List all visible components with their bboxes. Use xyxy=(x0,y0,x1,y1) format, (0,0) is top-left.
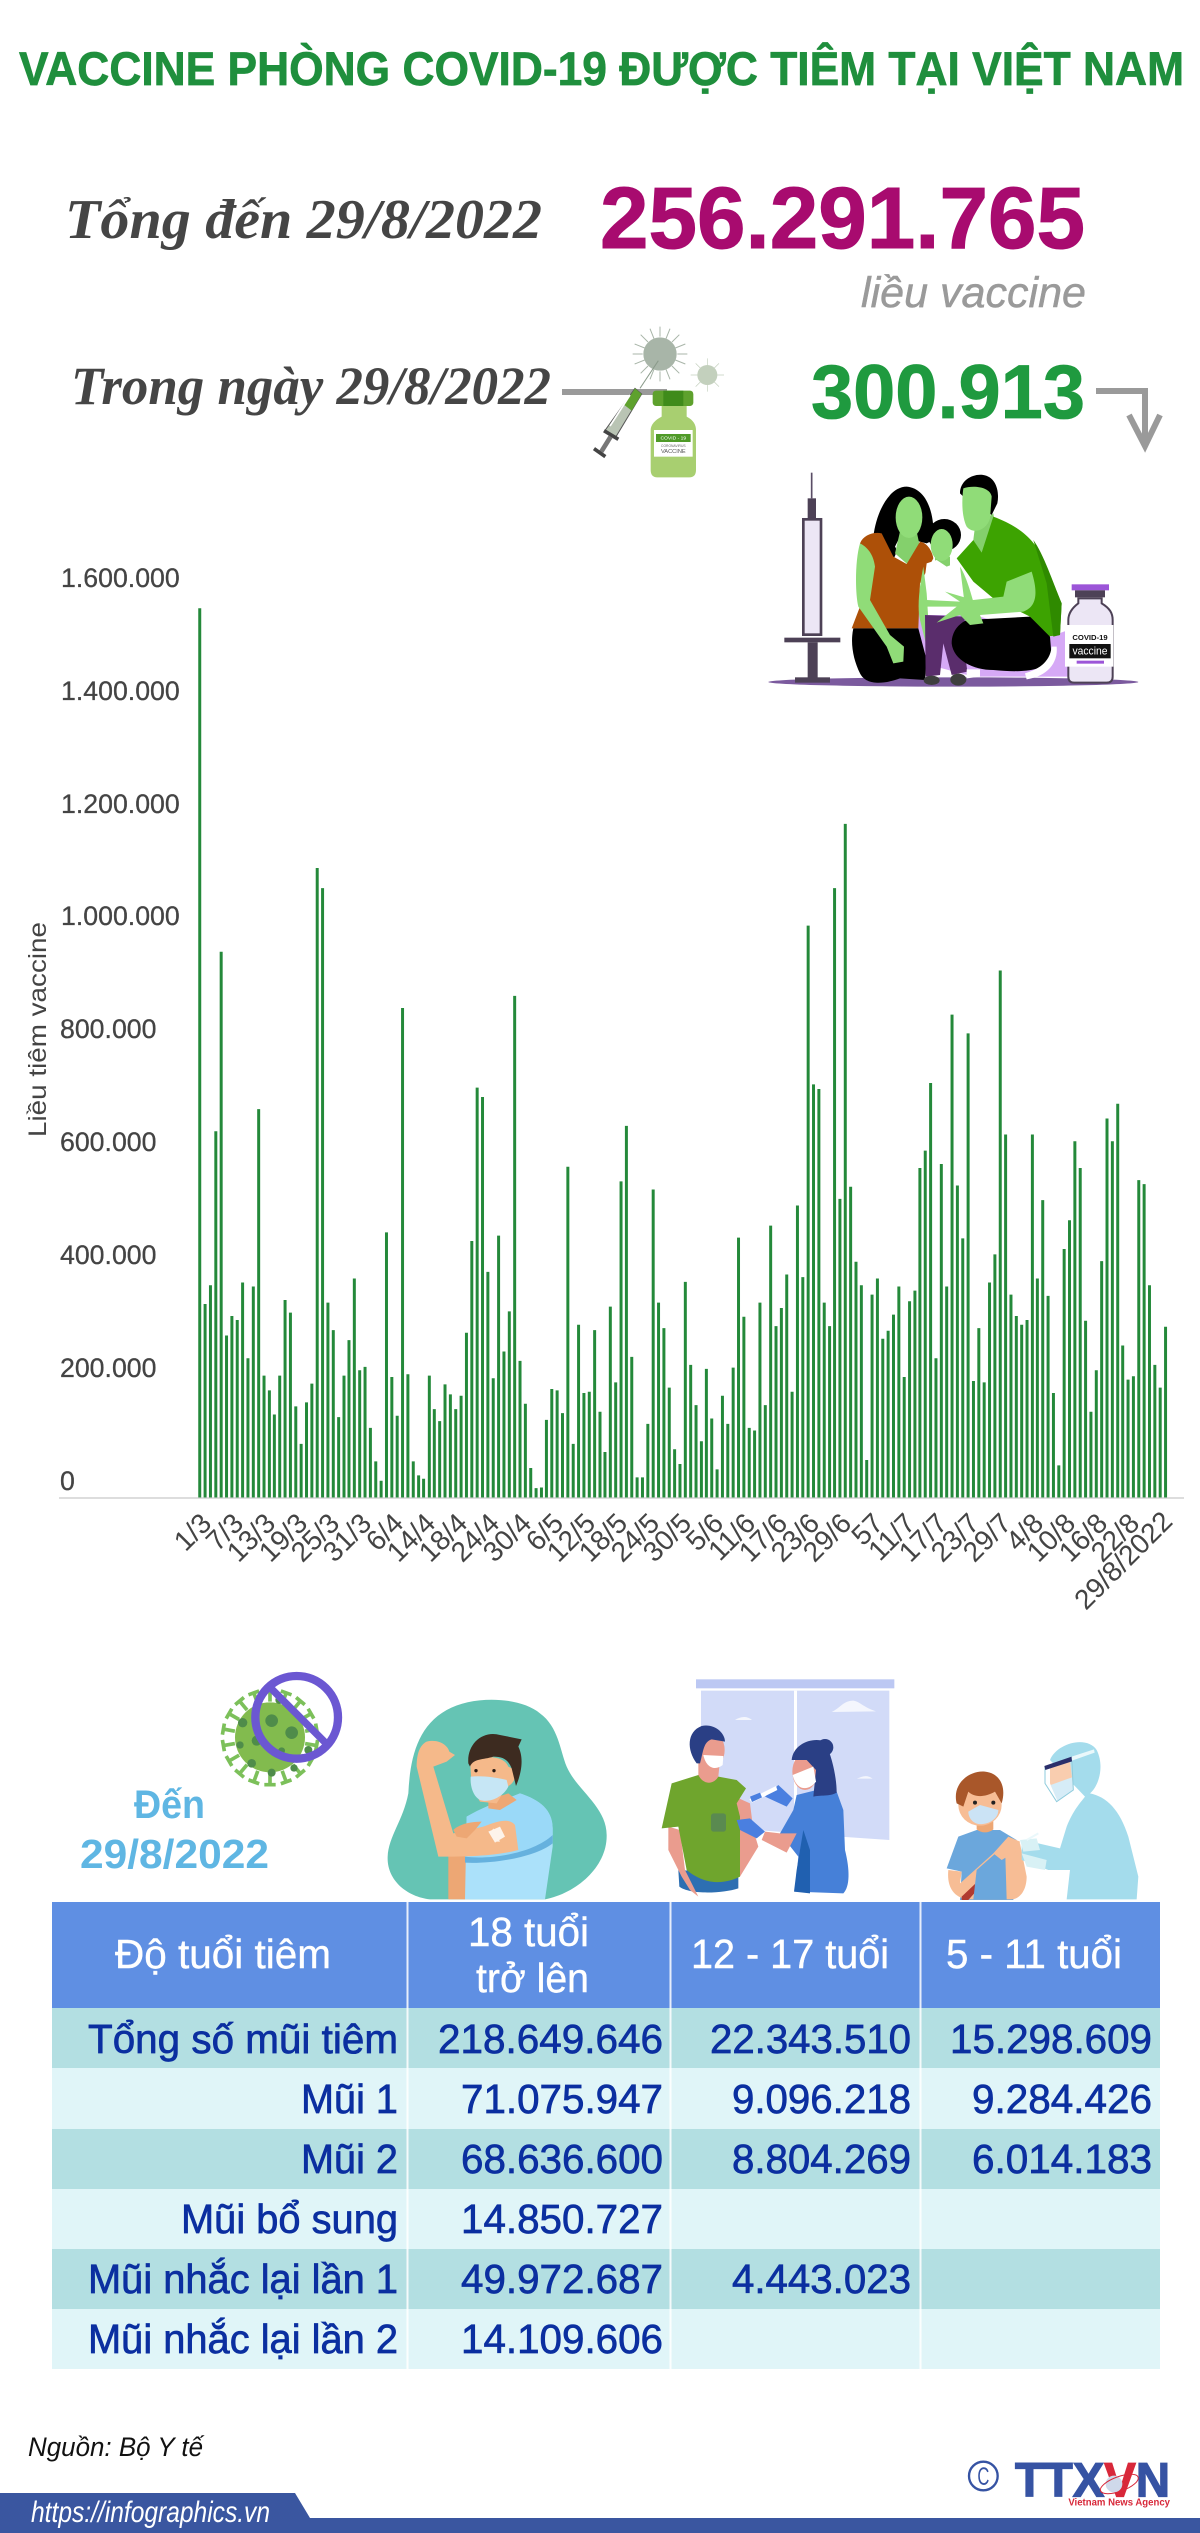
row: second dose xyxy=(52,2129,1160,2189)
x axis date labels: 29/6 xyxy=(797,1507,857,1568)
prohibition sign xyxy=(255,1676,338,1759)
x axis date labels: 17/6 xyxy=(733,1507,793,1568)
bars May to August xyxy=(600,824,1166,1497)
row: second dose: 6.014.183 xyxy=(972,2136,1152,2182)
y axis title: Liều tiêm vaccine xyxy=(24,922,52,1137)
illustration: child receiving injection xyxy=(947,1742,1138,1900)
illustration: family with vaccine xyxy=(768,473,1138,687)
y axis labels: 1.000.000 xyxy=(61,901,180,931)
row: first booster: 4.443.023 xyxy=(732,2256,911,2302)
row: first dose: 9.096.218 xyxy=(732,2076,911,2122)
table header xyxy=(52,1902,1160,2008)
icon: vaccine vial: COVID - 19 xyxy=(660,436,686,442)
x axis date labels: 30/5 xyxy=(637,1507,697,1568)
baseline xyxy=(59,1497,1184,1499)
row: second booster: 14.109.606 xyxy=(461,2316,663,2362)
x axis date labels: 17/7 xyxy=(893,1507,953,1568)
table header: 12 - 17 tuổi xyxy=(691,1931,889,1977)
x axis date labels: 7/3 xyxy=(200,1507,249,1557)
row: total: Tổng số mũi tiêm xyxy=(88,2016,398,2062)
date label xyxy=(80,1783,269,1877)
x axis date labels: 23/7 xyxy=(925,1507,985,1568)
logo: TTXVN: Vietnam News Agency xyxy=(1068,2498,1170,2509)
y axis labels: 200.000 xyxy=(60,1353,156,1383)
row: second booster xyxy=(52,2309,1160,2369)
row: additional dose: Mũi bổ sung xyxy=(181,2196,398,2242)
date label: Đến xyxy=(134,1783,205,1827)
bar chart: daily doses xyxy=(24,563,1184,1615)
row: total: 15.298.609 xyxy=(950,2016,1152,2062)
y axis labels: 1.600.000 xyxy=(61,563,180,593)
footer band with url: https://infographics.vn xyxy=(31,2496,270,2529)
x axis date labels: 24/5 xyxy=(605,1507,665,1568)
x axis date labels: 31/3 xyxy=(317,1507,377,1568)
x axis date labels: 11/6 xyxy=(702,1507,761,1566)
child xyxy=(947,1772,1027,1900)
footer band with url xyxy=(0,2493,1200,2533)
x axis date labels: 5/6 xyxy=(680,1507,729,1557)
patient xyxy=(662,1726,758,1897)
x axis date labels: 18/4 xyxy=(413,1507,473,1568)
x axis date labels: 19/3 xyxy=(253,1507,313,1568)
x axis date labels xyxy=(168,1505,1178,1615)
illustration: teen receiving injection by window xyxy=(662,1679,894,1897)
row: first booster: 49.972.687 xyxy=(461,2256,663,2302)
icon: vaccine vial: CORONAVIRUS xyxy=(661,444,686,448)
daily doses number: 300.913 xyxy=(811,350,1085,435)
total doses number: 256.291.765 xyxy=(600,170,1085,267)
row: first dose: 9.284.426 xyxy=(972,2076,1152,2122)
x axis date labels: 57 xyxy=(845,1507,889,1551)
row: first booster xyxy=(52,2249,1160,2309)
y axis labels: 1.400.000 xyxy=(61,676,180,706)
logo: TTXVN: C xyxy=(977,2463,989,2491)
woman xyxy=(852,487,934,683)
row: second dose: Mũi 2 xyxy=(301,2136,398,2182)
row: first dose xyxy=(52,2068,1160,2129)
nurse xyxy=(737,1739,849,1893)
row: total: 22.343.510 xyxy=(710,2016,911,2062)
row: first dose: 71.075.947 xyxy=(461,2076,663,2122)
doctor in protective suit xyxy=(1020,1742,1138,1899)
bars March to May xyxy=(200,608,595,1497)
table: doses by age xyxy=(52,1902,1160,2369)
icon: syringe xyxy=(594,361,658,457)
x axis date labels: 13/3 xyxy=(221,1507,281,1568)
x axis date labels: 25/3 xyxy=(285,1507,345,1568)
row: second dose: 68.636.600 xyxy=(461,2136,663,2182)
icon: vaccine vial: VACCINE xyxy=(661,449,686,455)
table header: Độ tuổi tiêm xyxy=(115,1931,331,1977)
y axis labels: 1.200.000 xyxy=(61,789,180,819)
arrow: decrease xyxy=(1096,391,1160,446)
y axis labels: 600.000 xyxy=(60,1127,156,1157)
x axis date labels: 6/5 xyxy=(520,1507,569,1557)
x axis date labels: 29/8/2022 xyxy=(1068,1505,1178,1615)
row: first dose: Mũi 1 xyxy=(301,2076,398,2122)
date label: 29/8/2022 xyxy=(80,1831,269,1877)
ground shadow xyxy=(768,677,1138,687)
child xyxy=(919,519,977,686)
icon: small virus xyxy=(691,358,724,392)
x axis date labels: 12/5 xyxy=(541,1507,601,1568)
row: additional dose: 14.850.727 xyxy=(461,2196,663,2242)
y axis labels xyxy=(60,563,180,1496)
x axis date labels: 14/4 xyxy=(381,1507,441,1568)
x axis date labels: 1/3 xyxy=(168,1507,217,1557)
illustration: adult flexing vaccinated arm xyxy=(388,1700,607,1899)
row: additional dose xyxy=(52,2189,1160,2249)
giant syringe xyxy=(784,473,840,683)
row: total xyxy=(52,2008,1160,2068)
x axis date labels: 10/8 xyxy=(1021,1507,1081,1568)
icon: crossed-out virus xyxy=(222,1676,338,1785)
x axis date labels: 6/4 xyxy=(360,1507,409,1557)
y axis labels: 0 xyxy=(60,1466,75,1496)
vaccine vial: COVID-19 xyxy=(1072,633,1108,642)
x axis date labels: 24/4 xyxy=(445,1507,505,1568)
man xyxy=(927,475,1062,679)
table header: 5 - 11 tuổi xyxy=(946,1931,1122,1977)
row: second booster: Mũi nhắc lại lần 2 xyxy=(88,2316,398,2362)
unit label: liều vaccine xyxy=(861,269,1086,317)
x axis date labels: 4/8 xyxy=(1000,1507,1049,1557)
y axis labels: 400.000 xyxy=(60,1240,156,1270)
x axis date labels: 11/7 xyxy=(862,1507,921,1566)
row: second dose: 8.804.269 xyxy=(732,2136,911,2182)
logo: TTXVN: TTXVN xyxy=(1015,2454,1170,2508)
vaccine vial xyxy=(1065,584,1113,683)
table header: trở lên xyxy=(476,1955,589,2001)
label: total to date: Tổng đến 29/8/2022 xyxy=(65,189,542,251)
x axis date labels: 30/4 xyxy=(477,1507,537,1568)
x axis date labels: 16/8 xyxy=(1053,1507,1113,1568)
x axis date labels: 29/7 xyxy=(957,1507,1017,1568)
row: first booster: Mũi nhắc lại lần 1 xyxy=(88,2256,398,2302)
icon: syringe, vial and virus xyxy=(562,327,724,477)
y axis labels: 800.000 xyxy=(60,1014,156,1044)
table header: 18 tuổi xyxy=(468,1909,589,1955)
source note: Nguồn: Bộ Y tế xyxy=(28,2432,205,2462)
vaccine vial: vaccine xyxy=(1072,645,1108,657)
row: total: 218.649.646 xyxy=(438,2016,663,2062)
label: on the day: Trong ngày 29/8/2022 xyxy=(71,356,551,416)
icon: vaccine vial xyxy=(651,391,696,477)
icon: large virus xyxy=(633,327,687,381)
x axis date labels: 23/6 xyxy=(765,1507,825,1568)
x axis date labels: 18/5 xyxy=(573,1507,633,1568)
x axis date labels: 22/8 xyxy=(1085,1507,1145,1568)
